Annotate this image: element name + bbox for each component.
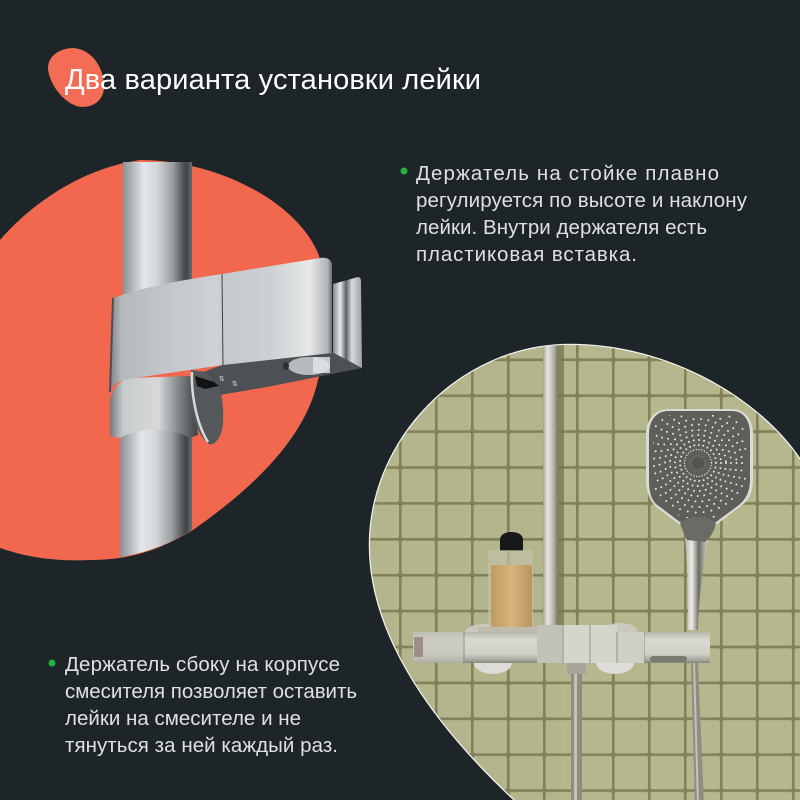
- wall discs: [474, 663, 512, 674]
- thermostat bar: [413, 632, 710, 663]
- text block: rail holder description: [400, 162, 748, 266]
- text block: mixer holder description: [48, 653, 357, 757]
- bullet: [400, 168, 408, 174]
- holder side clip: [333, 277, 362, 372]
- lever knob and marks: [195, 376, 219, 389]
- lever: [191, 370, 223, 444]
- description lines: тянуться за ней каждый раз.: [65, 734, 338, 757]
- coral circle backdrop: [0, 160, 326, 560]
- bottle: [488, 532, 533, 629]
- title accent blob: [48, 48, 104, 107]
- panel: rail holder photo: [0, 160, 362, 560]
- description lines: лейки на смесителе и не: [65, 707, 301, 730]
- shower rail lower: [120, 428, 192, 557]
- description lines: смесителя позволяет оставить: [65, 680, 357, 703]
- tile wall: [365, 340, 561, 800]
- holder underside: [195, 352, 362, 398]
- panel: mixer side holder photo: [365, 340, 800, 800]
- description lines: Держатель сбоку на корпусе: [65, 653, 340, 676]
- holder ring: [288, 357, 330, 375]
- head face: [649, 411, 750, 522]
- riser pole: [543, 340, 558, 625]
- description lines: регулируется по высоте и наклону: [416, 189, 748, 212]
- lower collar: [110, 376, 198, 438]
- head rim: [646, 409, 753, 525]
- description lines: [65, 653, 357, 757]
- shelf glass edge: [478, 627, 537, 632]
- head collar: [680, 517, 716, 542]
- hose left: [571, 665, 582, 800]
- photo contents: [365, 340, 800, 800]
- panel: rail holder photo: ⇅: [232, 380, 238, 388]
- shower rail upper: [123, 162, 192, 307]
- description lines: пластиковая вставка.: [416, 243, 637, 266]
- title: [48, 48, 481, 107]
- bottle glass: [488, 550, 533, 629]
- hose right: [691, 663, 704, 800]
- bottle cap: [500, 532, 523, 551]
- head center button: [691, 456, 705, 470]
- description lines: Держатель на стойке плавно: [416, 162, 719, 185]
- bottle liquid: [491, 565, 532, 627]
- description lines: [416, 162, 748, 266]
- holder band: [110, 258, 332, 392]
- bullet: [48, 660, 56, 666]
- hose connector: [567, 663, 586, 674]
- band seam: [222, 274, 223, 365]
- side holder slot: [650, 656, 687, 662]
- panel: rail holder photo: ⇅: [219, 375, 225, 383]
- nozzle dots: [653, 415, 746, 518]
- center valve block: [564, 625, 617, 663]
- shower head: [642, 407, 754, 630]
- handle: [685, 538, 708, 630]
- description lines: лейки. Внутри держателя есть: [416, 216, 707, 239]
- white photo outline: [370, 345, 800, 800]
- title text: Два варианта установки лейки: [65, 64, 481, 96]
